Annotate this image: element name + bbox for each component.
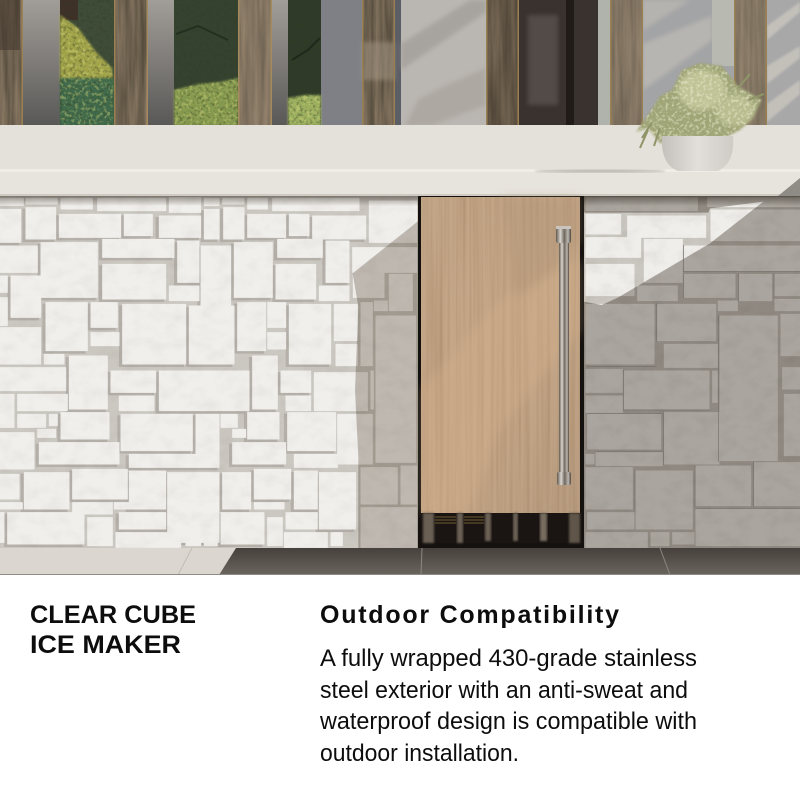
photo: outdoor kitchen scene xyxy=(0,0,800,575)
wooden posts xyxy=(0,0,767,126)
stone texture xyxy=(0,178,800,548)
stone countertop xyxy=(0,125,800,196)
ice maker appliance xyxy=(418,196,584,548)
base grille xyxy=(421,513,580,543)
product title xyxy=(30,601,196,659)
plant pot xyxy=(662,136,733,171)
product title: CLEAR CUBE xyxy=(30,601,196,629)
background: garden and walls behind the posts xyxy=(0,0,800,126)
concrete panel xyxy=(401,0,486,126)
stones, right wall xyxy=(586,198,800,547)
shadow cast on right wall xyxy=(584,196,800,549)
dark window xyxy=(519,0,610,126)
feature heading: Outdoor Compatibility xyxy=(320,601,619,629)
stones, left wall xyxy=(0,198,417,547)
left stone wall xyxy=(0,196,419,551)
stone shadows, left wall xyxy=(0,209,364,547)
feature description: waterproof design is compatible with xyxy=(319,708,697,735)
dark stone joints xyxy=(587,245,800,530)
gray columns xyxy=(23,0,401,126)
shaded wall with palm shadows xyxy=(643,0,800,126)
feature description: A fully wrapped 430-grade stainless xyxy=(320,645,697,672)
feature description: steel exterior with an anti-sweat and xyxy=(320,677,688,704)
potted plant xyxy=(630,60,765,171)
garden foliage xyxy=(60,0,321,126)
feature description: outdoor installation. xyxy=(320,740,519,767)
shadow cast on left wall xyxy=(353,197,419,551)
right stone wall xyxy=(584,196,800,549)
wood panel door xyxy=(421,197,580,513)
feature description xyxy=(319,645,697,767)
floor xyxy=(0,548,800,575)
product title: ICE MAKER xyxy=(30,631,181,659)
plant foliage xyxy=(630,60,765,150)
cavity xyxy=(418,196,584,548)
door handle xyxy=(556,226,571,485)
